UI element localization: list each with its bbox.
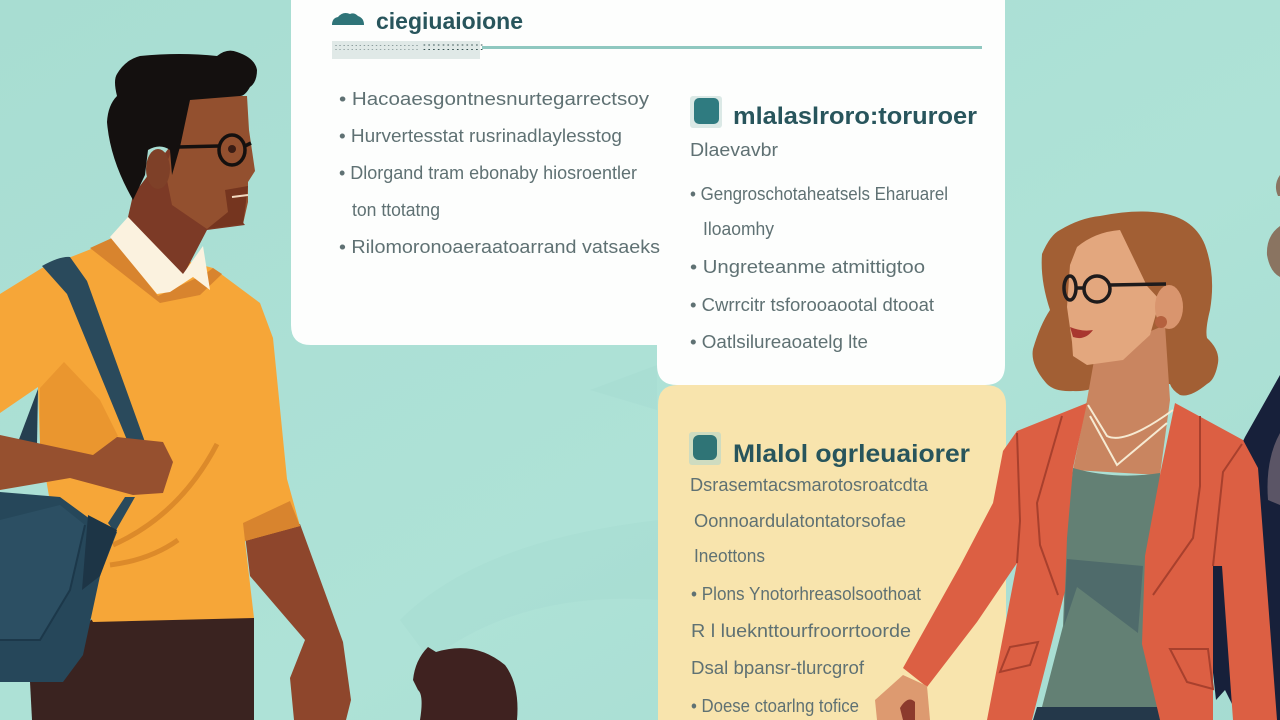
illustration: woman in coral cardigan <box>875 212 1277 720</box>
text block: yellow card: • Plons Ynotorhreasolsoothoat <box>691 584 921 604</box>
text block: left column bullets: ton ttotatng <box>352 200 440 220</box>
woman: hand <box>875 675 930 720</box>
woman: face <box>1067 230 1160 365</box>
text block: yellow card: R l lueknttourfroorrtoorde <box>691 621 911 641</box>
man: bag strap <box>42 257 145 532</box>
woman: pocket left <box>1000 642 1038 672</box>
heading: left column: ciegiuaioione <box>376 8 523 34</box>
woman: top <box>1042 468 1160 707</box>
text block: right column: Dlaevavbr <box>690 140 778 160</box>
man: sweater neckline <box>90 238 222 303</box>
woman: cardigan left <box>903 403 1087 720</box>
illustration: man with shoulder bag <box>0 51 351 720</box>
woman: cardigan lines <box>1017 416 1242 595</box>
right person: head <box>1267 175 1280 277</box>
man: trousers <box>30 618 254 720</box>
right person: body <box>1205 375 1280 720</box>
text block: right column <box>690 140 948 352</box>
heading: left column: ::::::::::::::::::::: <box>334 42 419 52</box>
panel: yellow card <box>658 385 1006 720</box>
man: sweater shade under arm <box>40 362 118 455</box>
man: collar <box>110 217 210 294</box>
man: bag buckle <box>82 515 117 590</box>
woman: trousers <box>1033 707 1163 720</box>
heading: left column <box>332 8 982 59</box>
panel: top white card <box>291 0 1005 385</box>
man: sweater <box>0 241 300 622</box>
woman: neck and chest <box>1073 325 1170 475</box>
illustration: person at right edge <box>1205 175 1280 720</box>
woman: top shade <box>1064 559 1143 633</box>
man: eye <box>228 145 236 153</box>
text block: right column: Iloaomhy <box>703 219 774 239</box>
woman: mouth <box>1070 327 1093 338</box>
text block: right column: • Cwrrcitr tsforooaootal dtooat <box>690 295 934 315</box>
man: bag flap seam <box>0 525 85 640</box>
man: bag flap <box>0 505 85 640</box>
text block: right column: • Ungreteanme atmittigtoo <box>690 257 925 277</box>
text block: yellow card: • Doese ctoarlng tofice <box>691 696 859 716</box>
text block: yellow card: Ineottons <box>694 546 765 566</box>
text block: left column bullets: • Hacoaesgontnesnurtegarrectsoy <box>339 89 649 109</box>
text block: right column: • Oatlsilureaoatelg lte <box>690 332 868 352</box>
text block: yellow card <box>690 475 929 716</box>
man: hair <box>107 51 257 200</box>
heading: right column: mlalaslroro:toruroer <box>733 103 977 130</box>
woman: cardigan right <box>1142 403 1277 720</box>
man: neck <box>128 140 245 276</box>
heading: yellow card: Mlalol ogrleuaiorer <box>733 440 970 468</box>
text block: right column: • Gengroschotaheatsels Eharuarel <box>690 184 948 204</box>
text block: yellow card: Oonnoardulatontatorsofae <box>694 511 906 531</box>
heading: left column: ::::::::::::: <box>422 42 484 53</box>
woman: necklace <box>1088 405 1173 465</box>
text block: left column bullets: • Hurvertesstat rusrinadlaylesstog <box>339 126 622 146</box>
text block: yellow card: Dsal bpansr-tlurcgrof <box>691 658 865 678</box>
text block: left column bullets: • Dlorgand tram ebonaby hiosroentler <box>339 163 637 183</box>
man: sweater folds <box>110 444 217 565</box>
man: far arm <box>245 524 351 720</box>
illustration: child head <box>413 647 518 720</box>
text block: yellow card: Dsrasemtacsmarotosroatcdta <box>690 475 929 495</box>
woman: earring <box>1155 316 1167 328</box>
man: glasses <box>178 135 251 165</box>
woman: hair <box>1033 212 1218 396</box>
woman: glasses <box>1064 276 1166 302</box>
man: ear <box>146 149 170 189</box>
man: beard <box>207 186 248 229</box>
text block: left column bullets: • Rilomoronoaeraatoarrand vatsaeks <box>339 237 660 257</box>
text block: left column bullets <box>339 89 660 257</box>
woman: hand shadow <box>900 700 915 720</box>
man: forearm and hand <box>0 435 173 495</box>
heading: right column <box>690 96 977 130</box>
heading: yellow card <box>689 432 970 468</box>
man: mouth <box>232 195 248 197</box>
man: sleeve cuff <box>243 501 300 541</box>
woman: pocket right <box>1170 649 1213 689</box>
man: bag <box>0 492 117 682</box>
woman: ear <box>1155 285 1183 329</box>
right person: scarf <box>1268 433 1280 505</box>
man: head <box>165 96 255 229</box>
man: rear strap <box>18 389 38 445</box>
